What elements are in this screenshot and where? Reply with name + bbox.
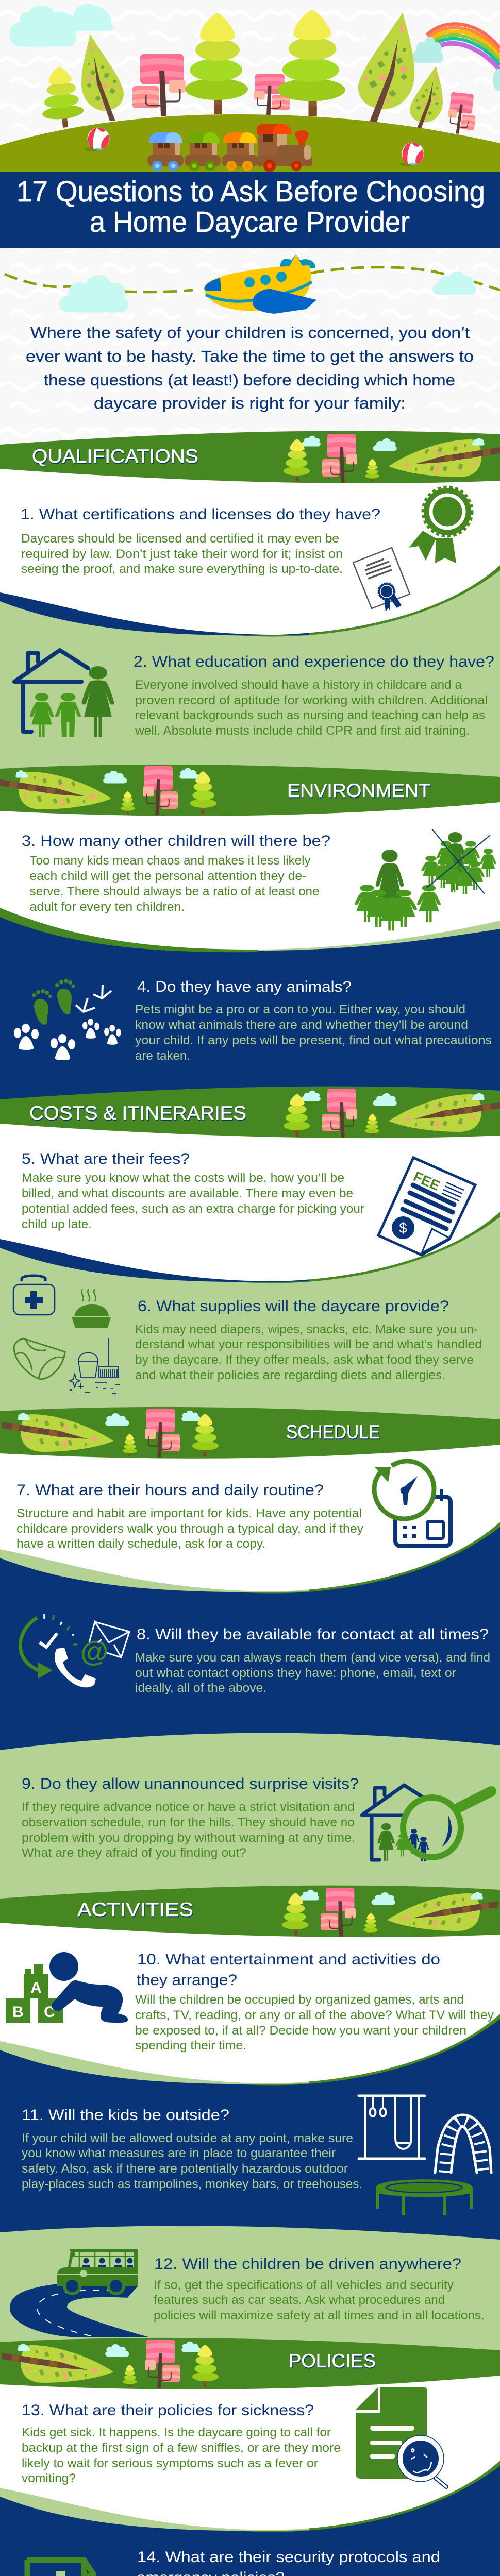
icon: big stacked tree one	[185, 13, 248, 114]
icon: contact options	[20, 1614, 129, 1687]
section banner: schedule	[0, 1407, 500, 1459]
text block: seeing the proof, and make sure everything is up-to-date.	[21, 562, 343, 576]
text block: derstand what your responsibilities will be and what’s handled	[135, 1337, 482, 1351]
text block: serve. There should always be a ratio of at least one	[30, 885, 320, 899]
section banner: qualifications: QUALIFICATIONS	[32, 446, 198, 467]
heading: 9. Do they allow unannounced surprise visits?	[22, 1775, 359, 1792]
panel: question 7	[16, 1459, 451, 1551]
text block	[135, 1323, 482, 1382]
heading: 13. What are their policies for sickness?	[22, 2402, 314, 2419]
icon: small stacked tree	[38, 65, 85, 130]
icon: baby with ABC blocks: A	[30, 1979, 42, 1996]
title: 17 Questions to Ask Before Choosing	[16, 175, 485, 208]
text block: Will the children be occupied by organized games, arts and	[135, 1993, 464, 2007]
panel: question 8	[20, 1614, 490, 1695]
text block: problem with you dropping by without warning at any time.	[22, 1831, 355, 1845]
icon: big stacked tree two	[277, 10, 345, 116]
icon: pink tree middle	[254, 74, 290, 115]
heading	[137, 2549, 440, 2576]
text block: child up late.	[22, 1217, 92, 1231]
text block: policies will maximize safety at all times and in all locations.	[154, 2309, 485, 2323]
text block: by the daycare. If they offer meals, ask what food they serve	[135, 1353, 474, 1367]
text block: play-places such as trampolines, monkey bars, or treehouses.	[22, 2177, 362, 2191]
text block: relevant backgrounds such as nursing and teaching can help as	[135, 708, 485, 722]
text block	[30, 854, 320, 914]
section banner: environment: ENVIRONMENT	[287, 780, 430, 801]
icon: swing set	[359, 2096, 425, 2159]
panel: question 2	[14, 650, 494, 738]
text block: If so, get the specifications of all vehicles and security	[154, 2278, 454, 2292]
text block: crafts, TV, reading, or any or all of the above? What TV will they	[135, 2008, 494, 2022]
icon: green award rosette	[409, 488, 471, 563]
illustration: airplane with dashed flight path and clouds	[5, 254, 500, 314]
icon: trampoline	[376, 2179, 473, 2215]
text block	[22, 2426, 341, 2485]
panel: question 11	[22, 2096, 491, 2215]
text block: have a written daily schedule, ask for a copy.	[16, 1537, 265, 1551]
icon: bowl of food	[72, 1289, 111, 1328]
text block: out what contact options they have: phone, email, text or	[135, 1666, 456, 1680]
heading: 11. Will the kids be outside?	[22, 2107, 229, 2124]
text block: proven record of aptitude for working with children. Additional	[135, 693, 488, 707]
text block: Pets might be a pro or a con to you. Either way, you should	[135, 1003, 465, 1016]
text block: childcare providers walk you through a typical day, and if they	[16, 1522, 363, 1536]
text block: If they require advance notice or have a strict visitation and	[22, 1800, 355, 1814]
icon: contact options: @	[80, 1635, 108, 1667]
intro text: these questions (at least!) before deciding which home	[44, 371, 455, 389]
icon: house under magnifying glass	[362, 1785, 491, 1861]
section banner: activities: ACTIVITIES	[77, 1899, 193, 1920]
text block: are taken.	[135, 1049, 190, 1063]
icon: cloud at right edge	[493, 69, 500, 91]
text block: you know what measures are in place to guarantee their	[22, 2146, 336, 2160]
text block: adult for every ten children.	[30, 900, 185, 914]
icon: ball left	[85, 128, 109, 151]
icon: teal cloud	[412, 37, 443, 63]
icon: ball right	[399, 142, 424, 166]
icon: emergency document with security shield	[27, 2560, 116, 2576]
heading: 6. What supplies will the daycare provide?	[138, 1298, 449, 1315]
text block: each child will get the personal attention they de-	[30, 869, 306, 883]
icon: cone tree left	[81, 35, 124, 121]
text block: required by law. Don’t just take their word for it; insist on	[21, 547, 343, 561]
text block: spending their time.	[135, 2039, 246, 2053]
section banner: qualifications	[0, 431, 500, 483]
panel: question 10	[6, 1951, 494, 2053]
text block	[22, 2131, 362, 2191]
text block: likely to wait for serious symptoms such as a fever or	[22, 2456, 318, 2470]
intro text: Where the safety of your children is concerned, you don’t	[30, 324, 470, 342]
text block: and what their policies are regarding diets and allergies.	[135, 1368, 445, 1382]
icon: pink tree right	[446, 92, 478, 135]
text block: Daycares should be licensed and certified it may even be	[21, 532, 339, 546]
hill	[0, 114, 500, 172]
heading: 7. What are their hours and daily routine?	[16, 1482, 324, 1499]
text block: Make sure you know what the costs will be, how you’ll be	[22, 1171, 344, 1185]
title banner	[0, 172, 500, 248]
icon: baby with ABC blocks	[6, 1952, 128, 2023]
text block: vomiting?	[22, 2471, 76, 2485]
text block: know what animals there are and whether they’ll be around	[135, 1018, 468, 1032]
text block: features such as car seats. Ask what procedures and	[154, 2293, 445, 2307]
text block	[135, 678, 488, 738]
text block	[135, 1651, 490, 1695]
heading: 10. What entertainment and activities do	[137, 1951, 440, 1968]
heading: 12. Will the children be driven anywhere?	[154, 2256, 461, 2273]
text block: Kids may need diapers, wipes, snacks, etc. Make sure you un-	[135, 1323, 478, 1336]
icon: diaper	[14, 1338, 65, 1379]
icon: footprints, arrows and paw prints	[14, 979, 121, 1060]
icon: fee document: FEE	[411, 1168, 442, 1194]
heading: 4. Do they have any animals?	[137, 978, 352, 995]
icon: document with sick face under magnifier	[356, 2387, 446, 2487]
text block: Too many kids mean chaos and makes it less likely	[30, 854, 310, 868]
heading: 3. How many other children will there be?	[22, 833, 330, 850]
heading: 8. Will they be available for contact at all times?	[137, 1626, 489, 1643]
icon: climbing arch	[435, 2115, 491, 2173]
icon: baby with ABC blocks: C	[44, 2004, 55, 2021]
text block: be exposed to, if at all? Decide how you want your children	[135, 2024, 466, 2038]
title: a Home Daycare Provider	[90, 206, 410, 239]
text block: Kids get sick. It happens. Is the daycare going to call for	[22, 2426, 331, 2439]
text block: your child. If any pets will be present, find out what precautions	[135, 1033, 492, 1047]
icon: school bus	[57, 2249, 138, 2294]
icon: certificate	[353, 548, 410, 612]
panel: question 4	[14, 978, 492, 1063]
text block	[135, 1003, 492, 1063]
icon: two clouds	[9, 4, 113, 47]
icon: rainbow	[427, 24, 500, 70]
text block: backup at the first sign of a few sniffles, or are they more	[22, 2441, 341, 2455]
icon: baby with ABC blocks: B	[12, 2004, 24, 2021]
section banner: costs and itineraries	[0, 1087, 500, 1138]
panel: question 3	[22, 829, 496, 930]
icon: toy train	[147, 124, 312, 172]
icon: first aid kit	[13, 1276, 55, 1315]
text block: Everyone involved should have a history in childcare and a	[135, 678, 462, 692]
section banner: activities	[0, 1886, 500, 1937]
section banner: policies: POLICIES	[289, 2350, 376, 2371]
text block: Structure and habit are important for kids. Have any potential	[16, 1506, 362, 1520]
title	[16, 175, 485, 239]
panel: question 1	[21, 488, 471, 612]
icon: bucket and broom	[70, 1338, 120, 1394]
text block	[135, 1993, 494, 2053]
heading	[137, 1951, 440, 1989]
panel: question 5	[22, 1150, 475, 1255]
intro text: ever want to be hasty. Take the time to get the answers to	[26, 347, 474, 365]
panel: question 6	[13, 1276, 482, 1394]
section banner: schedule: SCHEDULE	[286, 1421, 380, 1443]
text block	[22, 1171, 364, 1231]
panel: question 12	[10, 2249, 485, 2337]
icon: pink tree left	[132, 54, 186, 116]
panel: question 14	[27, 2549, 468, 2576]
icon: cone tree big	[358, 12, 414, 122]
text block: What are they afraid of you finding out?	[22, 1846, 246, 1860]
heading: 5. What are their fees?	[22, 1150, 190, 1167]
text block	[21, 532, 343, 576]
text block	[154, 2278, 485, 2323]
text block: billed, and what discounts are available. There may even be	[22, 1187, 353, 1200]
text block: If your child will be allowed outside at any point, make sure	[22, 2131, 353, 2145]
text block	[16, 1506, 363, 1551]
icon: adult with few children versus crossed-out crowded group	[355, 829, 496, 930]
text block: safety. Also, ask if there are potentially hazardous outdoor	[22, 2162, 348, 2176]
intro text	[26, 324, 474, 412]
section banner: costs and itineraries: COSTS & ITINERARIES	[29, 1103, 246, 1124]
icon: cone tree small	[410, 66, 443, 130]
heading: they arrange?	[137, 1972, 237, 1989]
heading: 14. What are their security protocols and	[137, 2549, 440, 2566]
text block: Make sure you can always reach them (and vice versa), and find	[135, 1651, 490, 1665]
heading: 1. What certifications and licenses do they have?	[21, 506, 380, 523]
section banner: environment	[0, 765, 500, 816]
heading: 2. What education and experience do they have?	[134, 653, 494, 670]
text block: ideally, all of the above.	[135, 1681, 266, 1695]
text block	[22, 1800, 355, 1860]
icon: house with family	[14, 650, 114, 737]
panel: question 13	[22, 2387, 446, 2487]
intro text: daycare provider is right for your family:	[94, 394, 406, 412]
icon: winding road	[10, 2284, 150, 2337]
icon: fee document	[378, 1158, 475, 1255]
panel: question 9	[22, 1775, 491, 1861]
illustration: top scenery	[0, 4, 500, 172]
icon: clock and calendar	[374, 1459, 451, 1546]
text block: potential added fees, such as an extra charge for picking your	[22, 1202, 364, 1216]
text block: well. Absolute musts include child CPR and first aid training.	[135, 724, 470, 738]
text block: observation schedule, run for the hills. They should have no	[22, 1816, 355, 1829]
icon: fee document: $	[399, 1220, 407, 1236]
section banner: policies	[0, 2338, 500, 2389]
